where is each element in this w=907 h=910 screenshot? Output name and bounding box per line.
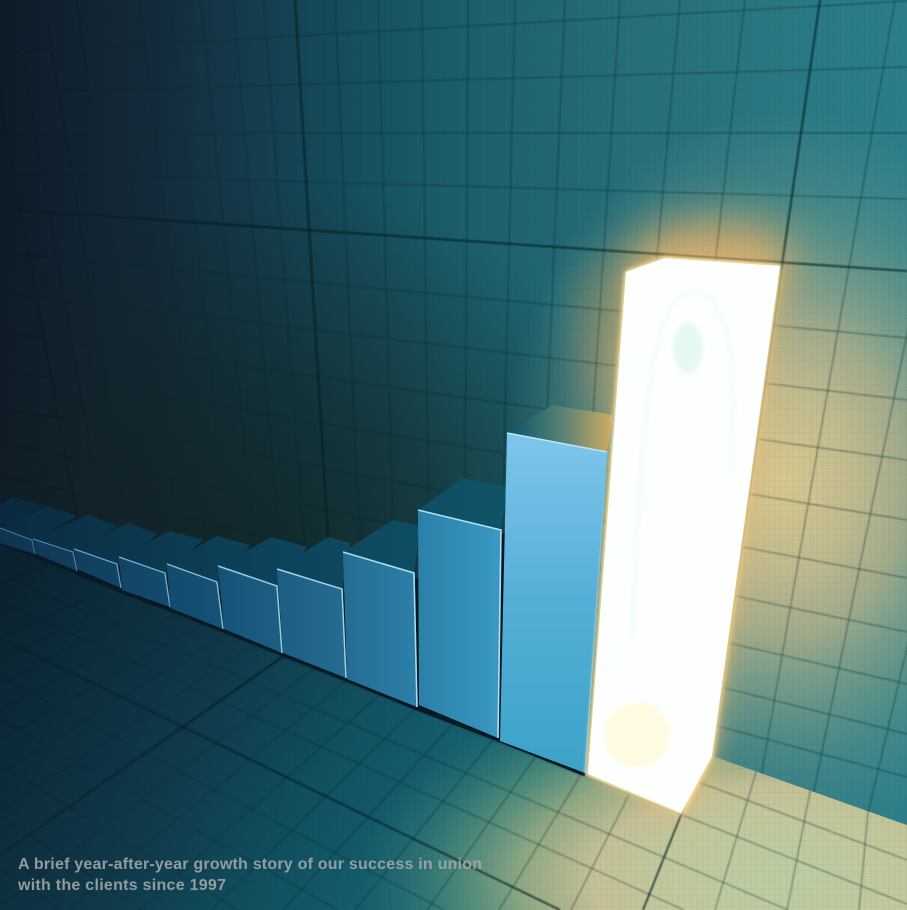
bar 1 xyxy=(0,497,43,526)
bar 5 xyxy=(119,531,203,607)
bar 6 xyxy=(167,536,250,629)
caption text: with the clients since 1997 xyxy=(17,877,226,894)
bar chart: blue bars xyxy=(0,405,613,775)
bar 2 xyxy=(0,506,78,554)
caption text: A brief year-after-year growth story of our success in union xyxy=(18,856,482,873)
bar 3 xyxy=(33,515,118,571)
bar 7 xyxy=(218,537,307,653)
bar 12: bright glowing bar xyxy=(586,257,781,815)
bar 8 xyxy=(277,537,350,678)
panel: floor with grid xyxy=(0,546,907,910)
highlight: lower warm hot spot xyxy=(604,702,670,768)
bar 4 xyxy=(74,523,158,588)
bar 11 xyxy=(500,405,613,773)
light spill around bright bar xyxy=(596,257,781,812)
highlight: upper pale hot spot xyxy=(673,323,703,373)
bar 9 xyxy=(343,520,420,707)
bar 10 xyxy=(418,478,507,738)
